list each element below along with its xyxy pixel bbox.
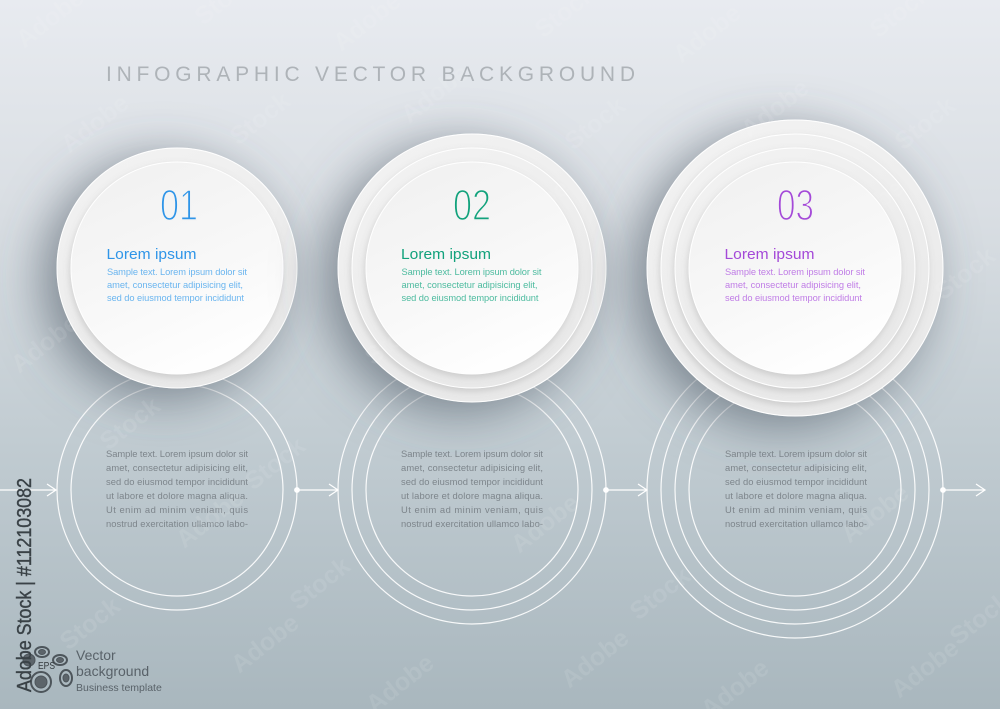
watermarks: Stock [890,92,961,156]
watermarks: Stock [625,562,696,626]
watermarks: Adobe [6,309,84,379]
step 1 text [106,181,247,303]
step 3 text: Sample text. Lorem ipsum dolor sit [725,267,865,277]
step 2 text: Sample text. Lorem ipsum dolor sit [402,267,542,277]
step 1 text: Sample text. Lorem ipsum dolor sit [107,267,247,277]
watermarks: Adobe [496,174,574,244]
step 1 text: amet, consectetur adipisicing elit, [107,280,243,290]
lower text: step 3: Ut enim ad minim veniam, quis [725,504,867,515]
lower text: step 3: sed do eiusmod tempor incididunt [725,476,867,487]
lower text: step 2 [401,448,543,529]
disc stack: step 1 [57,148,297,388]
watermarks: Adobe [171,484,249,554]
lower text: step 3: amet, consectetur adipisicing elit, [725,462,867,473]
watermarks: Adobe [506,489,584,559]
watermarks: Stock [360,307,431,371]
EPS caption: Business template [76,682,162,694]
lower text: step 2: sed do eiusmod tempor incididunt [401,476,543,487]
step 3 text [724,181,865,303]
step 1 text: Lorem ipsum [106,246,196,263]
lower text: step 1: amet, consectetur adipisicing elit, [106,462,248,473]
step 1 text: sed do eiusmod tempor incididunt [107,293,244,303]
watermarks: Adobe [716,289,794,359]
disc stack: step 2 [338,134,606,402]
watermarks: Adobe [396,59,474,129]
disc stack: step 3 [647,120,943,416]
watermarks: Stock [930,242,1000,306]
step 3 text: sed do eiusmod tempor incididunt [725,293,862,303]
watermarks: Adobe [226,609,304,679]
watermarks: Adobe [556,624,634,694]
step 2 text [401,181,542,303]
lower text: step 3 [725,448,867,529]
watermarks: Stock [560,92,631,156]
watermarks: Stock [95,392,166,456]
lower text: step 1: nostrud exercitation ullamco labo- [106,518,248,529]
step 2 text: sed do eiusmod tempor incididunt [402,293,539,303]
watermarks: Stock [240,432,311,496]
watermarks: Stock [55,592,126,656]
watermarks: Stock [225,87,296,151]
lower text: step 3: nostrud exercitation ullamco labo- [725,518,867,529]
lower text: step 2: Ut enim ad minim veniam, quis [401,504,543,515]
lower text: step 1 [106,448,248,529]
lower text: step 2: ut labore et dolore magna aliqua. [401,490,543,501]
lower text: step 1: ut labore et dolore magna aliqua. [106,490,248,501]
step 2 text: amet, consectetur adipisicing elit, [402,280,538,290]
outline rings: step 1 [57,370,297,610]
lower text: step 2: amet, consectetur adipisicing elit, [401,462,543,473]
step 3 text: Lorem ipsum [724,246,814,263]
lower text: step 3: Sample text. Lorem ipsum dolor sit [725,448,867,459]
watermarks: Adobe [836,479,914,549]
step 1 text: 01 [160,181,198,230]
watermarks: Adobe [668,0,746,69]
step 3 text: amet, consectetur adipisicing elit, [725,280,861,290]
lower text: step 2: Sample text. Lorem ipsum dolor sit [401,448,543,459]
step 3 text: 03 [777,181,814,230]
EPS badge icon [23,647,72,692]
lower text: step 1: sed do eiusmod tempor incididunt [106,476,248,487]
timeline arrows [0,484,985,496]
outline rings: step 2 [338,356,606,624]
step 2 text: 02 [453,181,491,230]
outline rings: step 3 [647,342,943,638]
watermarks: Adobe [886,634,964,704]
lower text: step 2: nostrud exercitation ullamco labo- [401,518,543,529]
watermarks: Adobe [56,89,134,159]
lower text: step 3: ut labore et dolore magna aliqua. [725,490,867,501]
title: INFOGRAPHIC VECTOR BACKGROUND [106,63,635,86]
step 2 text: Lorem ipsum [401,246,491,263]
watermarks: Adobe [736,74,814,144]
stock id vertical: Adobe Stock | #112103082 [14,478,36,692]
EPS caption [76,647,162,694]
EPS badge icon: EPS [38,661,55,672]
EPS caption: background [76,663,149,679]
watermarks: Adobe [191,279,269,349]
EPS caption: Vector [76,647,116,663]
watermarks: Stock [285,552,356,616]
lower text: step 1: Sample text. Lorem ipsum dolor sit [106,448,248,459]
lower text: step 1: Ut enim ad minim veniam, quis [106,504,248,515]
watermarks: Adobe [831,174,909,244]
